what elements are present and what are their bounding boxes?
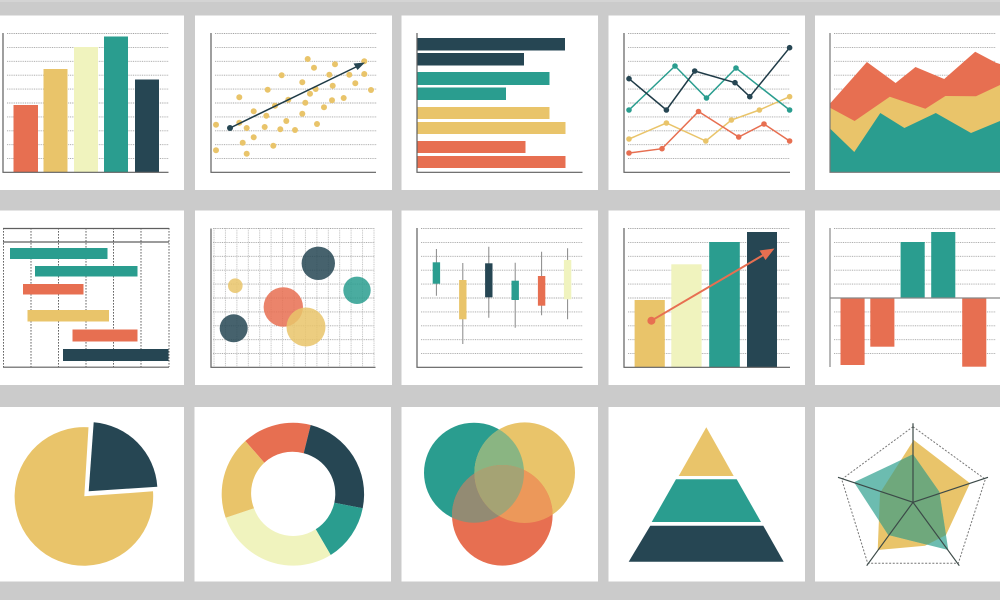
donut: yellow segment: [222, 441, 264, 518]
panel: pie chart: [0, 407, 184, 582]
venn overlaps: [452, 430, 552, 523]
line: yellow series: [626, 94, 792, 144]
donut: teal segment: [316, 503, 363, 555]
panel: vertical bar chart: [0, 16, 184, 190]
panel: pyramid: [608, 407, 805, 582]
positive bars: [901, 232, 955, 298]
growth bars: [635, 232, 777, 367]
arrow: growth trend: [647, 248, 774, 325]
radar spokes: [838, 423, 988, 566]
scatter dots: [213, 56, 374, 157]
panel: venn diagram: [402, 407, 598, 582]
line: orange series: [626, 109, 792, 156]
area: teal layer: [830, 113, 1000, 172]
panel: donut chart: [194, 407, 391, 582]
radar outline: [842, 427, 985, 563]
bars: five coloured columns: [14, 36, 159, 172]
pie slice: large yellow: [15, 427, 153, 566]
pyramid: middle tier: [652, 479, 761, 522]
bubbles: [220, 247, 371, 346]
horizontal bars: [417, 38, 566, 168]
panel: radar chart: [815, 407, 1000, 582]
radar: overlap: [878, 454, 946, 545]
line: teal series: [626, 63, 792, 113]
venn circles: [424, 422, 575, 566]
panel: multi-line chart: [608, 16, 805, 190]
line: navy series: [626, 45, 792, 113]
area: yellow layer: [830, 85, 1000, 172]
donut: navy segment: [304, 425, 364, 508]
radar: teal series: [854, 454, 948, 550]
candle wicks: [436, 247, 568, 344]
negative bars: [840, 298, 986, 367]
pie slice: navy exploded: [89, 422, 157, 491]
donut: cream segment: [226, 508, 331, 566]
panel: growth bars with arrow: [608, 210, 805, 385]
panel: horizontal bar chart: [402, 16, 598, 190]
panel: scatter plot: [195, 16, 392, 190]
panel: candlestick chart: [402, 210, 598, 385]
pyramid: bottom tier: [629, 526, 784, 562]
candle bodies: [433, 260, 571, 319]
gantt bars: [10, 248, 168, 361]
radar: yellow series: [878, 440, 970, 550]
pyramid: top tier: [679, 427, 734, 476]
area: orange layer: [830, 52, 1000, 172]
panel: stacked area chart: [815, 16, 1000, 190]
panel: gantt chart: [0, 210, 184, 385]
panel: positive and negative bars: [815, 210, 1000, 385]
arrow: trend line: [227, 62, 365, 131]
panel: bubble chart: [195, 210, 392, 385]
donut: orange segment: [245, 423, 311, 463]
